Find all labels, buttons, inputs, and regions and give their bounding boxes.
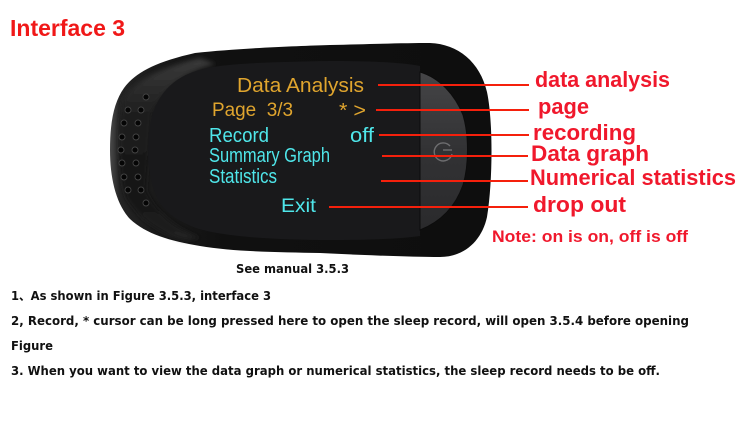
power icon [434,143,452,161]
label: drop out: drop out [533,192,627,217]
screen summary graph: Summary Graph [209,145,330,167]
label: recording: recording [533,120,636,145]
screen text [209,75,374,217]
label: page: page [538,94,589,119]
device body [110,43,492,257]
instruction 3: 3. When you want to view the data graph or numerical statistics, the sleep record needs to be off. [11,364,660,378]
pointer lines [329,85,529,207]
label: data analysis: data analysis [535,67,670,92]
note: Note: on is on, off is off [492,227,688,246]
speaker dots [118,94,149,206]
screen page indicator: Page 3/3 [212,100,293,121]
screen record: Record [209,125,269,147]
screen heading: Data Analysis: Data Analysis [237,75,364,97]
instruction 2 continued: Figure [11,339,53,353]
instructions [11,289,689,378]
instruction 1: 1、As shown in Figure 3.5.3, interface 3 [11,289,271,303]
caption: See manual 3.5.3 [236,262,349,276]
screen cursor: * > [339,100,366,122]
title: Interface 3 [10,15,125,41]
left shoulder highlight [119,58,215,240]
power button [420,72,468,230]
label: Data graph: Data graph [531,141,649,166]
label: Numerical statistics: Numerical statistics [530,165,736,190]
screen statistics: Statistics [209,166,277,188]
device illustration [110,43,492,257]
screen [148,61,420,240]
instruction 2: 2, Record, * cursor can be long pressed here to open the sleep record, will open 3.5.4 before opening [11,314,689,328]
callout labels [530,67,736,217]
screen exit: Exit [281,196,317,217]
screen off: off [350,125,374,147]
